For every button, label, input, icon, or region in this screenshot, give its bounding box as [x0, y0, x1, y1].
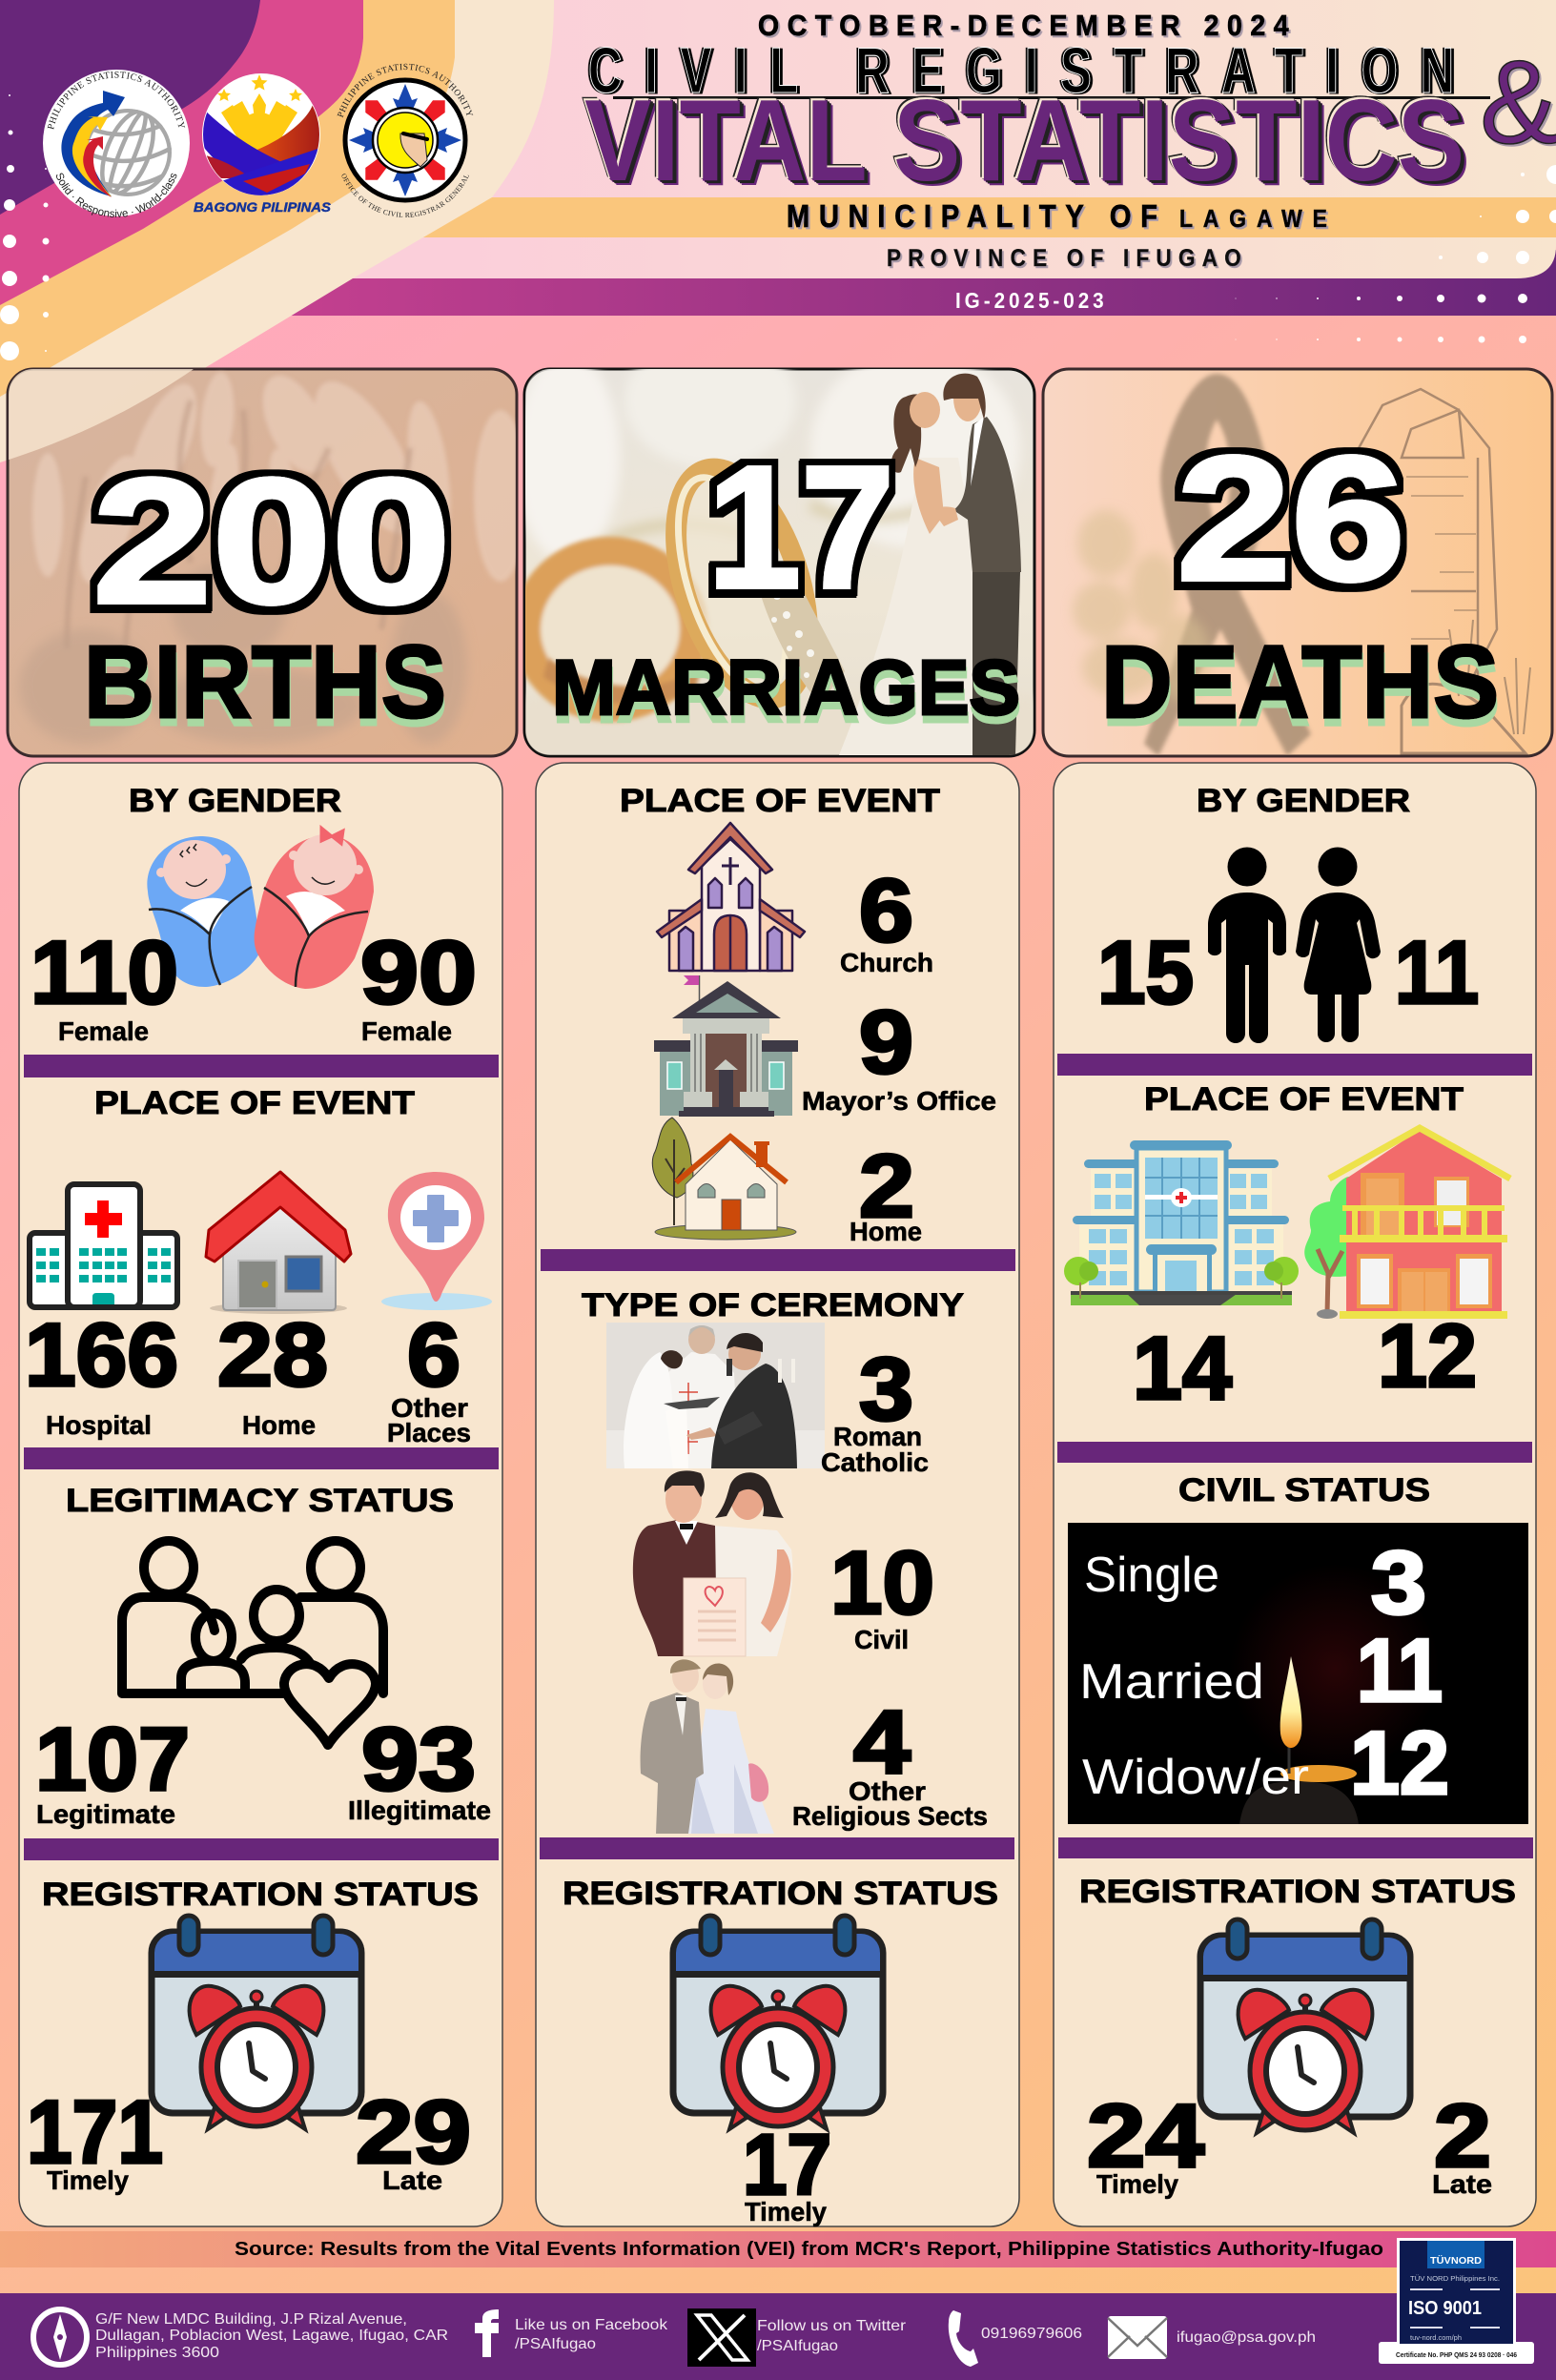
stat: late births: 29	[356, 2082, 471, 2182]
stat: civil: 10	[830, 1532, 934, 1632]
stat: other places births	[387, 1304, 471, 1447]
births count: 200	[92, 441, 451, 641]
stat: male births: Female	[58, 1016, 149, 1046]
title rule	[613, 96, 1490, 99]
icon: family with heart	[122, 1541, 383, 1745]
stat: illegitimate: Illegitimate	[348, 1795, 491, 1825]
candle	[1239, 1656, 1359, 1824]
heading: registration status: REGISTRATION STATUS	[563, 1876, 998, 1912]
stat: other places births: Other	[391, 1393, 468, 1423]
stat: hospital births: Hospital	[46, 1410, 152, 1440]
stat: home weddings: 2	[859, 1136, 914, 1236]
heading: registration status: REGISTRATION STATUS	[1079, 1874, 1516, 1910]
heading: civil status: CIVIL STATUS	[1178, 1472, 1430, 1508]
icon: mayor's office	[654, 975, 798, 1117]
stat: illegitimate	[348, 1709, 491, 1825]
icon: male figure	[1208, 847, 1286, 1043]
stat: Roman Catholic: Roman	[833, 1422, 922, 1451]
illustration: civil wedding couple	[633, 1470, 792, 1656]
email: ifugao@psa.gov.ph	[1177, 2329, 1316, 2346]
stat: other places births: Places	[387, 1418, 471, 1447]
stat: church weddings	[840, 860, 933, 977]
municipality: LAGAWE	[1179, 206, 1327, 233]
address: G/F New LMDC Building, J.P Rizal Avenue,	[95, 2311, 407, 2328]
address	[95, 2311, 448, 2361]
decorative orange band	[0, 0, 455, 397]
stat: male deaths: 15	[1097, 922, 1194, 1022]
icon: baby girl	[255, 828, 374, 989]
province: PROVINCE OF IFUGAO	[887, 245, 1241, 272]
stat: mayor's office weddings: 9	[859, 992, 913, 1092]
groom and bride illustration	[839, 374, 1021, 755]
logo: Philippine Statistics Authority: PHILIPPINE STATISTICS AUTHORITY	[48, 71, 185, 130]
stat: timely deaths: Timely	[1096, 2169, 1178, 2199]
header purple ribbon	[0, 250, 1556, 316]
stat: other place deaths: 12	[1378, 1305, 1477, 1405]
civil status: married: 11	[1357, 1620, 1443, 1720]
decorative cream band	[0, 0, 554, 462]
icon: mail	[1108, 2316, 1167, 2359]
title line one: CIVIL REGISTRATION	[588, 33, 1454, 107]
header pale band	[0, 0, 1556, 278]
stat: late births: Late	[382, 2165, 442, 2195]
icon: calendar with alarm clock	[1200, 1919, 1410, 2133]
civil status: married	[1079, 1620, 1443, 1720]
heading: registration status: REGISTRATION STATUS	[42, 1877, 479, 1913]
icon: phone	[949, 2310, 978, 2367]
ISO certification badge: TÜV NORD Philippines Inc.	[1410, 2274, 1500, 2283]
stat: late deaths: 2	[1434, 2085, 1491, 2185]
heading: by gender: BY GENDER	[129, 783, 341, 819]
stat: timely deaths: 24	[1087, 2085, 1204, 2185]
marriages label: MARRIAGES	[552, 645, 1020, 731]
logo: Office of the Civil Registrar General: OFFICE OF THE CIVIL REGISTRAR GENERAL	[341, 174, 469, 217]
stat: other religious sects	[792, 1692, 988, 1831]
deaths label: DEATHS	[1101, 624, 1499, 739]
stat: home weddings: Home	[850, 1217, 922, 1246]
icon: calendar with alarm clock	[152, 1916, 361, 2129]
stat: mayor's office weddings: Mayor’s Office	[802, 1086, 996, 1116]
stat: home births	[217, 1304, 328, 1440]
ISO certification badge: ISO 9001	[1408, 2298, 1482, 2319]
logo: Bagong Pilipinas	[194, 73, 331, 215]
heading: type of ceremony: TYPE OF CEREMONY	[582, 1287, 964, 1323]
twitter text: /PSAIfugao	[757, 2338, 838, 2354]
civil status: widow/er: 12	[1350, 1713, 1449, 1813]
stat: late deaths: Late	[1432, 2169, 1492, 2199]
panel: marriages details	[536, 763, 1019, 2226]
facebook text: Like us on Facebook	[515, 2317, 668, 2333]
civil status: single	[1084, 1532, 1426, 1632]
address: Philippines 3600	[95, 2345, 219, 2361]
logo: Office of the Civil Registrar General: PHILIPPINE STATISTICS AUTHORITY	[338, 63, 473, 118]
panel: births details	[19, 763, 502, 2226]
header	[0, 0, 1556, 462]
facebook text: /PSAIfugao	[515, 2336, 596, 2352]
stat: female births: Female	[361, 1016, 452, 1046]
facebook text	[515, 2317, 668, 2352]
stat: other religious sects: 4	[853, 1692, 911, 1792]
icon: church	[657, 823, 805, 971]
births label: BIRTHS	[84, 624, 446, 739]
twitter text: Follow us on Twitter	[757, 2318, 907, 2334]
decorative purple band	[0, 0, 260, 215]
stat: male births: 110	[31, 922, 178, 1022]
stat: Roman Catholic: 3	[859, 1339, 913, 1439]
stat: hospital deaths: 14	[1133, 1318, 1232, 1418]
civil status: widow/er: Widow/er	[1082, 1750, 1309, 1805]
stat: legitimate: 107	[35, 1709, 190, 1809]
stat: mayor's office weddings	[802, 992, 996, 1116]
civil status: widow/er	[1082, 1713, 1449, 1813]
heading: legitimacy status: LEGITIMACY STATUS	[66, 1483, 454, 1519]
stat: other places births: 6	[407, 1304, 461, 1405]
civil status: single: 3	[1371, 1532, 1426, 1632]
icon: calendar with alarm clock	[673, 1916, 883, 2129]
stat: other religious sects: Other	[849, 1776, 926, 1806]
stat: home births: Home	[242, 1410, 316, 1440]
icon: X	[687, 2308, 756, 2367]
icon: facebook	[475, 2309, 499, 2357]
stat: illegitimate: 93	[361, 1709, 476, 1809]
stat: female deaths: 11	[1395, 922, 1479, 1022]
icon: female figure	[1296, 847, 1381, 1042]
icon: two-storey house	[1304, 1128, 1510, 1319]
stat: home weddings	[850, 1136, 922, 1246]
photo: cupped hands	[0, 362, 527, 744]
stat: female births	[360, 922, 477, 1046]
municipality	[787, 198, 1327, 234]
logo: Philippine Statistics Authority: Solid · Responsive · World-class	[56, 174, 177, 217]
heading: place of event: PLACE OF EVENT	[620, 783, 940, 819]
ISO certification badge: tuv-nord.com/ph	[1410, 2335, 1462, 2342]
illustration: watercolor couple	[641, 1659, 774, 1834]
photo: rings and couple	[525, 369, 1034, 755]
white dots left	[0, 94, 50, 360]
document code: IG-2025-023	[955, 288, 1104, 313]
heading: by gender: BY GENDER	[1197, 783, 1410, 819]
stat: female births: 90	[360, 922, 477, 1022]
photo: Roman Catholic ceremony	[606, 1323, 825, 1468]
stat: church weddings: Church	[840, 948, 933, 977]
stat: civil: Civil	[854, 1625, 909, 1654]
ISO certification badge: TÜVNORD	[1430, 2254, 1482, 2267]
ISO certification badge: Certificate No. PHP QMS 24 93 0208 · 046	[1396, 2350, 1517, 2359]
decorative pink band	[0, 0, 363, 305]
civil status: single: Single	[1084, 1548, 1219, 1603]
cream corner overlay	[9, 369, 194, 460]
stat: home births: 28	[217, 1304, 328, 1405]
civil status: married: Married	[1079, 1654, 1264, 1710]
icon: compass	[33, 2309, 87, 2365]
twitter text	[757, 2318, 907, 2354]
icon: home with tree	[652, 1118, 796, 1240]
ISO certification badge	[1379, 2238, 1534, 2364]
candle photo with civil status	[1068, 1523, 1528, 1824]
logo: Office of the Civil Registrar General	[338, 63, 473, 217]
stat: legitimate: Legitimate	[36, 1799, 175, 1829]
icon: hospital building	[1064, 1140, 1299, 1305]
phone number: 09196979606	[981, 2326, 1082, 2342]
icon: hospital	[30, 1184, 177, 1307]
stat: timely births: 171	[27, 2082, 163, 2182]
logo caption: BAGONG PILIPINAS	[194, 200, 331, 215]
footer	[0, 2238, 1556, 2380]
stat: Roman Catholic	[821, 1339, 929, 1477]
header orange ribbon	[0, 197, 1556, 237]
stat: hospital births: 166	[25, 1304, 178, 1405]
marriages count: 17	[707, 429, 894, 625]
deaths count: 26	[1177, 421, 1405, 618]
source note: Source: Results from the Vital Events Information (VEI) from MCR's Report, Philippine Statistics Authority-Ifugao	[235, 2239, 1383, 2260]
stat: other religious sects: Religious Sects	[792, 1801, 988, 1831]
stat: timely marriages: 17	[743, 2118, 831, 2213]
stat: timely marriages: Timely	[745, 2197, 827, 2226]
panel: marriages banner	[515, 334, 1034, 756]
photo: mourning ribbon and gravestone	[1073, 374, 1530, 756]
period heading: OCTOBER-DECEMBER 2024	[758, 10, 1289, 42]
icon: house	[206, 1172, 351, 1314]
municipality: MUNICIPALITY OF	[787, 198, 1157, 234]
panel: deaths details	[1054, 763, 1536, 2226]
source band	[0, 2231, 1556, 2267]
heading: place of event: PLACE OF EVENT	[94, 1085, 415, 1121]
logo: Philippine Statistics Authority	[43, 70, 190, 217]
panel: births banner	[0, 362, 527, 756]
white dots right	[1236, 165, 1556, 343]
heading: place of event: PLACE OF EVENT	[1144, 1081, 1464, 1118]
stat: timely births: Timely	[47, 2165, 129, 2195]
icon: baby boy	[147, 836, 259, 987]
stat: church weddings: 6	[859, 860, 913, 960]
stat: Roman Catholic: Catholic	[821, 1447, 929, 1477]
panel: deaths banner	[1043, 369, 1552, 756]
icon: location pin	[381, 1172, 492, 1310]
address: Dullagan, Poblacion West, Lagawe, Ifugao, CAR	[95, 2328, 448, 2344]
